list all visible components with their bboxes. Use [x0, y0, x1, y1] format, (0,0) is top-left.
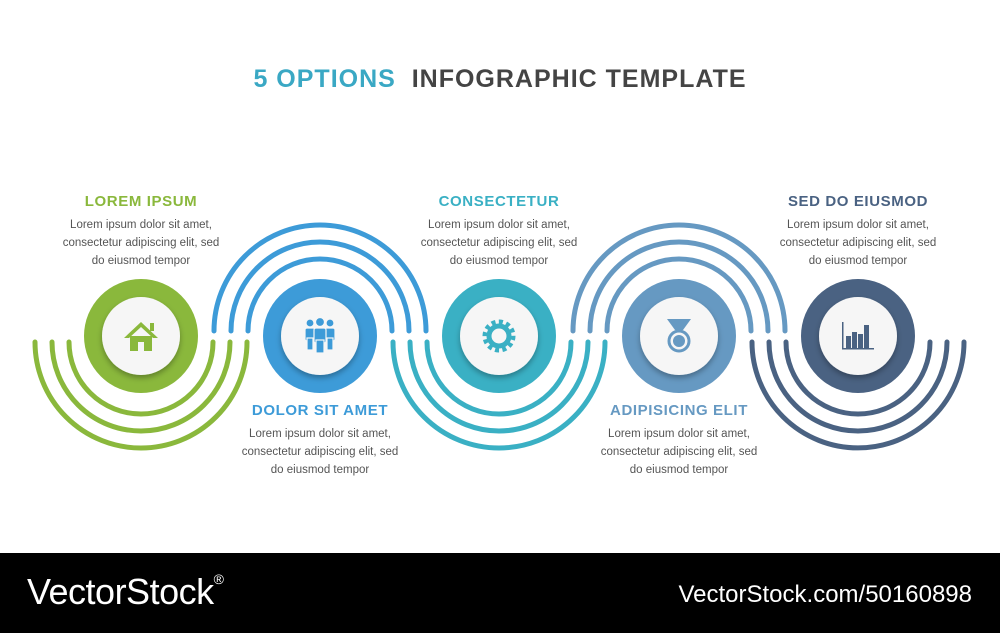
footer logo: VectorStock® [27, 571, 223, 612]
text block 5: do eiusmod tempor [809, 255, 907, 267]
icon: gear [485, 322, 513, 350]
text block 1: consectetur adipiscing elit, sed [63, 237, 219, 249]
title: 5 OPTIONS INFOGRAPHIC TEMPLATE [253, 65, 747, 93]
text block 5: SED DO EIUSMOD [788, 193, 928, 210]
text block 5: Lorem ipsum dolor sit amet, [787, 219, 929, 231]
arcs: blue top [214, 225, 426, 331]
text block 5: consectetur adipiscing elit, sed [780, 237, 936, 249]
text block 2 [242, 402, 398, 476]
text block 2: DOLOR SIT AMET [252, 402, 388, 419]
footer bar [0, 553, 1000, 633]
footer url: VectorStock.com/50160898 [678, 581, 972, 608]
text block 4: consectetur adipiscing elit, sed [601, 446, 757, 458]
circle 1 [84, 279, 198, 393]
text block 4: Lorem ipsum dolor sit amet, [608, 428, 750, 440]
text block 3: do eiusmod tempor [450, 255, 548, 267]
icon: chart [842, 322, 874, 350]
icon: medal [667, 319, 691, 351]
text block 1: LOREM IPSUM [85, 193, 197, 210]
arcs: dark bottom [752, 342, 964, 448]
text block 3: CONSECTETUR [439, 193, 559, 210]
arcs: green bottom [35, 342, 247, 448]
text block 3: Lorem ipsum dolor sit amet, [428, 219, 570, 231]
text block 4: do eiusmod tempor [630, 464, 728, 476]
text block 4: ADIPISICING ELIT [610, 402, 748, 419]
icon: house [124, 322, 158, 351]
text block 3: consectetur adipiscing elit, sed [421, 237, 577, 249]
text block 4 [601, 402, 757, 476]
text block 2: Lorem ipsum dolor sit amet, [249, 428, 391, 440]
circle 5 [801, 279, 915, 393]
circle 3 [442, 279, 556, 393]
icon: people [305, 318, 335, 353]
arcs: steel top [573, 225, 785, 331]
circle 2 [263, 279, 377, 393]
text block 3 [421, 193, 577, 267]
text block 1: do eiusmod tempor [92, 255, 190, 267]
arcs: teal bottom [393, 342, 605, 448]
text block 2: consectetur adipiscing elit, sed [242, 446, 398, 458]
text block 5 [780, 193, 936, 267]
circle 4 [622, 279, 736, 393]
text block 1 [63, 193, 219, 267]
text block 1: Lorem ipsum dolor sit amet, [70, 219, 212, 231]
text block 2: do eiusmod tempor [271, 464, 369, 476]
